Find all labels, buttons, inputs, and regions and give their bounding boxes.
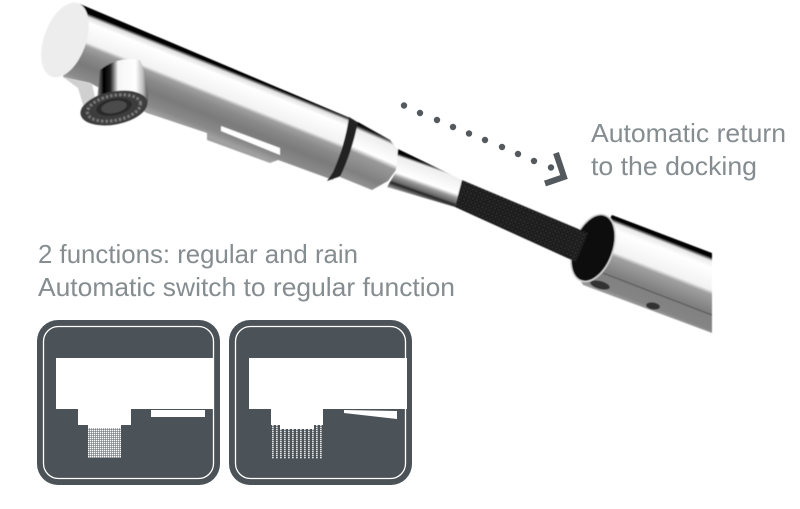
- slider slot: [151, 410, 205, 417]
- spout end cap: [32, 0, 98, 84]
- icon panel: rain function: [229, 320, 412, 485]
- caption: automatic return: Automatic return: [591, 118, 786, 148]
- caption: functions: 2 functions: regular and rain: [38, 239, 358, 269]
- sleeve tab: [589, 279, 611, 291]
- sleeve opening: [562, 208, 624, 288]
- icon panel: regular function: [37, 320, 220, 485]
- lower neck behind aerator: [63, 77, 98, 110]
- caption: automatic return: [591, 118, 786, 181]
- tapered section: [387, 149, 462, 207]
- caption: functions: [38, 239, 455, 302]
- sleeve groove: [603, 273, 712, 315]
- black collar ring: [327, 117, 359, 181]
- caption: automatic return: to the docking: [591, 151, 757, 181]
- dotted return arrow: [401, 102, 564, 184]
- braided hose: [455, 180, 588, 262]
- aerator face: [77, 85, 151, 131]
- button slot: [221, 126, 280, 155]
- regular water jet: [88, 428, 121, 458]
- middle section: [340, 122, 398, 190]
- spout cross-section: [56, 358, 214, 428]
- rain water jet: [271, 425, 323, 459]
- sleeve screw hole: [646, 302, 660, 310]
- pull-out spout photo: [32, 0, 712, 333]
- spout cross-section: [249, 358, 407, 429]
- docking sleeve: [575, 215, 712, 333]
- spout body: [63, 4, 350, 180]
- aerator cylinder: [97, 59, 148, 118]
- slider slot tilted: [344, 410, 397, 419]
- caption: functions: Automatic switch to regular function: [38, 272, 455, 302]
